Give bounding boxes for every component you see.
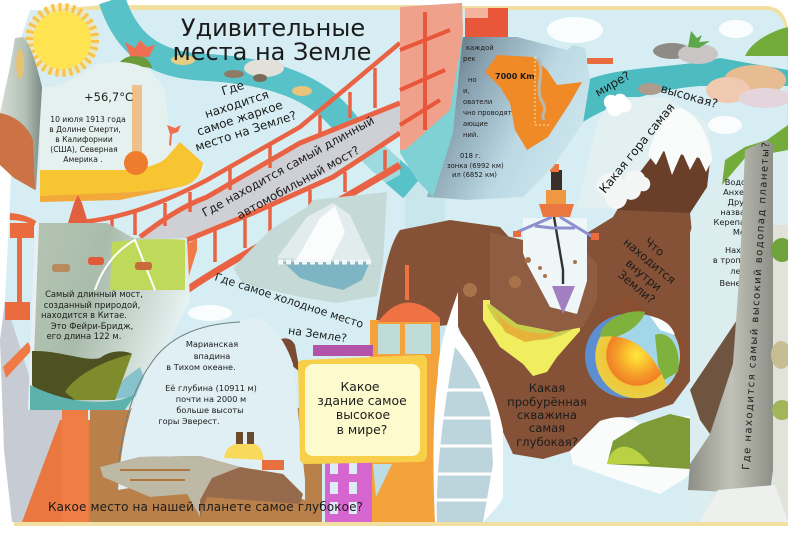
skyscrapers — [313, 265, 440, 522]
question: deepest borehole — [507, 381, 587, 449]
question: hottest place — [193, 78, 298, 154]
waterfall panel: в тропи — [713, 255, 746, 265]
panel: longest natural bridge — [30, 223, 190, 410]
waterfall panel: Венес — [719, 278, 745, 288]
question: deepest place: Какое место на нашей планете самое глубокое? — [48, 500, 363, 514]
rocks and plants right — [638, 27, 788, 108]
panel: longest river fold: 018 г. — [460, 152, 481, 160]
mountain panel — [577, 94, 713, 213]
panel: deepest place: впадина — [194, 351, 230, 361]
question card: tallest building — [298, 355, 427, 464]
question: deepest borehole: пробурённая — [507, 395, 587, 409]
panel: longest river fold: рек — [463, 55, 476, 63]
icon: drill rig — [513, 164, 599, 240]
panel: longest river fold — [400, 3, 590, 200]
panel: deepest place: Марианская — [186, 339, 238, 349]
panel: deepest place: больше высоты — [176, 405, 244, 415]
question: longest road bridge: автомобильный мост? — [234, 143, 362, 222]
left bridge tower base — [0, 237, 322, 522]
question: inside the Earth: внутри — [623, 256, 664, 294]
question: hottest place: самое жаркое — [195, 98, 284, 139]
waterfall panel: Водо — [725, 177, 746, 187]
question: highest mountain: Какая гора самая — [596, 100, 678, 196]
panel: longest river fold: ающие — [463, 120, 488, 128]
question card: tallest building: высокое — [336, 407, 390, 422]
question: highest mountain — [596, 81, 719, 196]
panel: deepest place — [100, 318, 305, 517]
panel: hottest place: (США), Северная — [50, 145, 118, 154]
panel: longest river fold: ний. — [463, 131, 478, 139]
question: inside the Earth: Земли? — [615, 267, 658, 306]
panel: hottest place: Америка . — [63, 155, 103, 164]
panel: longest natural bridge: его длина 122 м. — [47, 331, 121, 341]
panel: deepest place: Её глубина (10911 м) — [165, 383, 257, 393]
long road bridge — [10, 43, 400, 340]
question: hottest place: место на Земле? — [193, 108, 298, 154]
ocean floor flap — [100, 456, 303, 517]
clouds — [188, 17, 753, 321]
question: longest road bridge: Где находится самый длинный — [200, 113, 377, 220]
waterfall panel: Дру — [728, 197, 744, 207]
waterfall panel — [688, 125, 788, 522]
question: coldest place: Где самое холодное место — [213, 270, 365, 331]
panel: deepest place: горы Эверест. — [158, 416, 220, 426]
question: deepest borehole: Какая — [529, 381, 565, 395]
question: hottest place: Где — [220, 78, 246, 98]
Burj-style tower — [433, 292, 503, 522]
panel: longest river fold: 7000 Km — [495, 72, 535, 81]
waterfall panel: назва — [720, 207, 745, 217]
waterfall panel: Ме — [733, 227, 745, 237]
question: inside the Earth — [615, 235, 679, 306]
title — [173, 14, 371, 66]
question: inside the Earth: Что — [642, 235, 667, 259]
panel: longest river fold: ил (6852 км) — [452, 171, 497, 179]
question card: tallest building: здание самое — [317, 393, 407, 408]
brown ground behind panel — [278, 338, 300, 372]
panel: longest river fold: и, — [463, 87, 470, 95]
panel: longest river fold: но — [468, 76, 477, 84]
waterfall panel: Керепа — [714, 217, 745, 227]
panel: longest river fold: ователи — [463, 98, 492, 106]
panel: longest natural bridge: Самый длинный мост, — [45, 289, 143, 299]
iceberg panel — [233, 192, 387, 303]
question: deepest borehole: глубокая? — [516, 435, 578, 449]
title: Удивительные — [181, 14, 365, 42]
clouds and forest bottom — [570, 414, 710, 512]
panel: longest natural bridge: Это Фейри-Бридж, — [51, 321, 133, 331]
question: inside the Earth: находится — [621, 235, 679, 287]
panel: longest natural bridge: находится в Китае. — [41, 310, 127, 320]
question: hottest place: находится — [203, 87, 271, 121]
icon: earth globe — [585, 296, 688, 398]
question: longest river: мире? — [592, 68, 633, 100]
sun — [26, 4, 98, 76]
panel: longest natural bridge: созданный природой, — [44, 300, 140, 310]
question: deepest borehole: самая — [529, 421, 565, 435]
panel: hottest place: в Калифорнии — [55, 135, 113, 144]
panel: hottest place: 10 июля 1913 года — [50, 115, 126, 124]
panel: deepest place: в Тихом океане. — [166, 362, 236, 372]
title: места на Земле — [173, 38, 371, 66]
waterfall panel: Анхе — [723, 187, 744, 197]
distant orange bridge — [587, 58, 613, 64]
panel: hottest place: в Долине Смерти, — [49, 125, 121, 134]
question card: tallest building: Какое — [340, 379, 380, 394]
panel: hottest place: +56,7°C — [84, 90, 133, 104]
panel: longest river fold: зонка (6992 км) — [447, 162, 504, 170]
rocks and flower left — [120, 40, 312, 96]
panel: longest river fold: каждой — [466, 44, 494, 52]
question: highest mountain: высокая? — [659, 81, 719, 111]
waterfall panel: Нахо — [725, 245, 746, 255]
question: deepest borehole: скважина — [517, 408, 577, 422]
panel: hottest place — [0, 37, 205, 202]
panel: longest river fold: чно проводят — [463, 109, 512, 117]
waterfall panel: лес — [730, 266, 745, 276]
question: highest waterfall: Где находится самый высокий водопад планеты? — [741, 142, 772, 470]
distant red tower — [465, 8, 508, 37]
question: coldest place: на Земле? — [287, 324, 348, 345]
left river — [112, 0, 412, 188]
right river — [583, 58, 788, 122]
panel: deepest place: почти на 2000 м — [176, 394, 246, 404]
earth cross-section brown — [372, 150, 710, 459]
icon: ship — [224, 432, 284, 470]
question card: tallest building: в мире? — [337, 422, 387, 437]
